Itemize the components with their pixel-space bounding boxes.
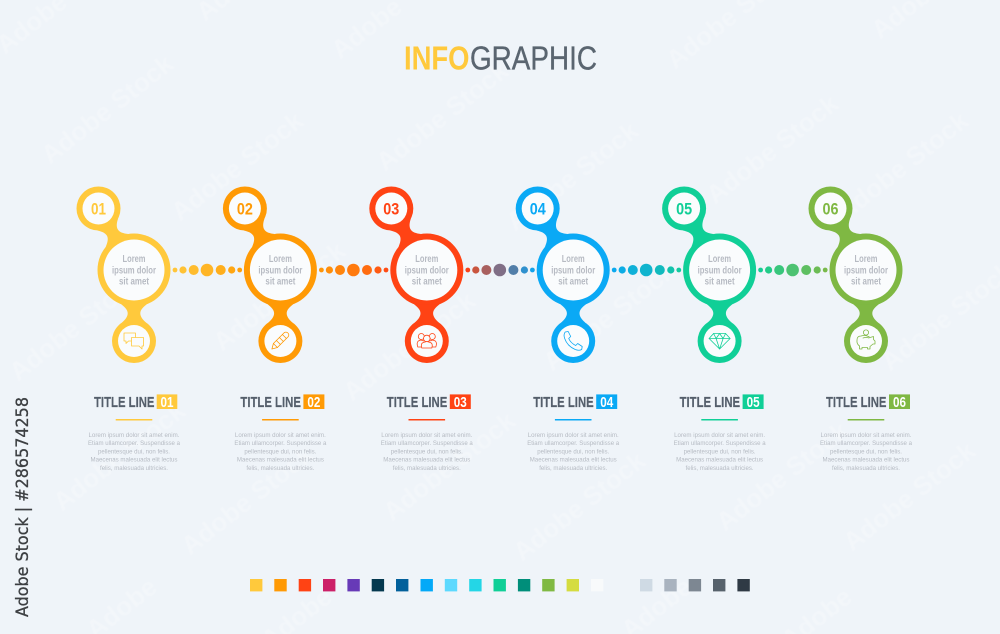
text block: step 03: TITLE LINE <box>387 394 447 411</box>
text block: step 04: Etiam ullamcorper. Suspendisse a <box>527 440 619 447</box>
text block: step 06: TITLE LINE <box>826 394 886 411</box>
text: Adobe Stock <box>175 439 319 561</box>
panel: step 06 node <box>808 186 902 363</box>
stock id side label: Adobe Stock | #286574258 <box>13 397 33 617</box>
icon: pencil <box>272 332 289 349</box>
text: Adobe Stock <box>830 105 974 227</box>
text block: step 04: pellentesque dui, non felis. <box>537 448 609 455</box>
icon: people <box>417 334 436 348</box>
dotted connector 5 <box>758 264 828 276</box>
text: Adobe Stock <box>710 415 854 537</box>
text block: step 06: Etiam ullamcorper. Suspendisse a <box>820 440 912 447</box>
panel: step 03 node: sit amet <box>412 276 442 288</box>
text block: step 01: pellentesque dui, non felis. <box>98 448 170 455</box>
text block: step 05 <box>674 394 766 472</box>
text block: step 01 <box>88 394 180 472</box>
text block: step 02: pellentesque dui, non felis. <box>244 448 317 455</box>
text block: step 06: pellentesque dui, non felis. <box>830 448 902 455</box>
panel: step 06 node: ipsum dolor <box>844 265 888 276</box>
text: Adobe Stock <box>47 395 191 517</box>
text block: step 03: 03 <box>454 394 467 411</box>
text block: step 06 <box>820 394 912 472</box>
text block: step 04: Lorem ipsum dolor sit amet enim. <box>528 432 619 439</box>
text: Adobe Stock <box>207 235 351 357</box>
panel: step 04 node: Lorem <box>562 254 585 265</box>
panel: step 04 node: sit amet <box>558 276 589 288</box>
text block: step 03: Maecenas malesuada elit lectus <box>383 457 471 464</box>
dotted connector 2 <box>319 264 388 276</box>
text block: step 01: Lorem ipsum dolor sit amet enim. <box>88 432 180 439</box>
text block: step 03: pellentesque dui, non felis. <box>391 448 463 455</box>
text: Adobe Stock <box>165 105 309 227</box>
text block: step 05: Etiam ullamcorper. Suspendisse a <box>674 440 766 447</box>
text block: step 05: Maecenas malesuada elit lectus <box>676 457 764 464</box>
text block: step 05: pellentesque dui, non felis. <box>684 448 756 455</box>
text: Adobe Stock <box>837 435 981 557</box>
text: Adobe Stock <box>500 115 644 237</box>
text: Adobe Stock <box>3 265 147 387</box>
text block: step 02: Maecenas malesuada elit lectus <box>237 457 325 464</box>
title <box>404 40 597 76</box>
panel: step 02 node: Lorem <box>269 254 292 265</box>
panel: step 05 node: 05 <box>676 200 692 218</box>
panel: step 06 node: 06 <box>822 200 838 218</box>
panel: step 06 node: Lorem <box>854 254 878 265</box>
panel: step 03 node: 03 <box>383 200 399 218</box>
icon: chat bubbles <box>124 333 144 349</box>
icon: piggy bank <box>857 330 875 349</box>
dotted connector 1 <box>173 264 242 276</box>
panel: step 03 node <box>369 186 463 363</box>
text block: step 04: felis, malesuada ultricies. <box>539 465 607 472</box>
panel: step 01 node <box>76 186 170 363</box>
text block: step 02: 02 <box>307 394 320 411</box>
text block: step 03: Lorem ipsum dolor sit amet enim. <box>381 432 472 439</box>
text block: step 02: TITLE LINE <box>240 394 301 411</box>
text: Adobe Stock <box>537 255 681 377</box>
panel: step 01 node: 01 <box>91 200 106 218</box>
title: GRAPHIC <box>470 40 597 76</box>
text block: step 05: felis, malesuada ultricies. <box>686 465 754 472</box>
text block: step 02: Lorem ipsum dolor sit amet enim. <box>235 432 326 439</box>
text block: step 02 <box>234 394 327 472</box>
text block: step 03 <box>381 394 473 472</box>
panel: step 01 node: ipsum dolor <box>112 265 156 276</box>
panel: step 01 node: sit amet <box>119 276 150 288</box>
text: Adobe Stock <box>370 55 514 177</box>
text block: step 06: Maecenas malesuada elit lectus <box>822 457 910 464</box>
text block: step 01: Etiam ullamcorper. Suspendisse a <box>88 440 180 447</box>
text block: step 02: felis, malesuada ultricies. <box>246 465 315 472</box>
icon: phone <box>564 332 582 350</box>
icon: diamond <box>709 334 730 349</box>
text block: step 01: felis, malesuada ultricies. <box>100 465 168 472</box>
text: Adobe Stock <box>35 48 179 170</box>
text block: step 06: Lorem ipsum dolor sit amet enim. <box>820 432 912 439</box>
text block: step 01: TITLE LINE <box>94 394 154 411</box>
panel: step 02 node: ipsum dolor <box>258 265 302 276</box>
panel: step 05 node: Lorem <box>708 254 731 265</box>
text block: step 05: TITLE LINE <box>680 394 740 411</box>
dotted connector 3 <box>465 264 535 276</box>
panel: step 04 node <box>516 186 610 363</box>
panel: step 05 node: sit amet <box>705 276 735 288</box>
text: Adobe Stock <box>507 445 651 567</box>
colour palette swatches <box>250 579 750 591</box>
text block: step 04: Maecenas malesuada elit lectus <box>530 457 617 464</box>
text block: step 01: Maecenas malesuada elit lectus <box>90 457 178 464</box>
text block: step 04 <box>527 394 619 472</box>
text: Adobe Stock <box>700 88 844 210</box>
text block: step 06: felis, malesuada ultricies. <box>832 465 900 472</box>
panel: step 05 node <box>662 186 756 363</box>
panel: step 03 node: ipsum dolor <box>405 265 449 276</box>
text block: step 05: Lorem ipsum dolor sit amet enim. <box>674 432 765 439</box>
dotted connector 4 <box>612 264 681 276</box>
panel: step 04 node: 04 <box>530 200 546 218</box>
panel: step 02 node: sit amet <box>265 276 296 288</box>
text block: step 04: TITLE LINE <box>533 394 594 411</box>
text block: step 04: 04 <box>600 394 614 411</box>
text block: step 06: 06 <box>893 394 906 411</box>
panel: step 06 node: sit amet <box>851 276 882 288</box>
text block: step 05: 05 <box>747 394 760 411</box>
text block: step 03: felis, malesuada ultricies. <box>393 465 461 472</box>
title: INFO <box>404 40 470 76</box>
text: Adobe Stock <box>337 285 481 407</box>
text block: step 03: Etiam ullamcorper. Suspendisse a <box>381 440 473 447</box>
panel: step 02 node: 02 <box>237 200 253 218</box>
panel: step 02 node <box>223 186 317 363</box>
text: Adobe Stock <box>377 405 521 527</box>
text block: step 02: Etiam ullamcorper. Suspendisse a <box>234 440 327 447</box>
panel: step 04 node: ipsum dolor <box>551 265 595 276</box>
text block: step 01: 01 <box>160 394 174 411</box>
panel: step 01 node: Lorem <box>122 254 146 265</box>
panel: step 05 node: ipsum dolor <box>698 265 742 276</box>
panel: step 03 node: Lorem <box>415 254 438 265</box>
